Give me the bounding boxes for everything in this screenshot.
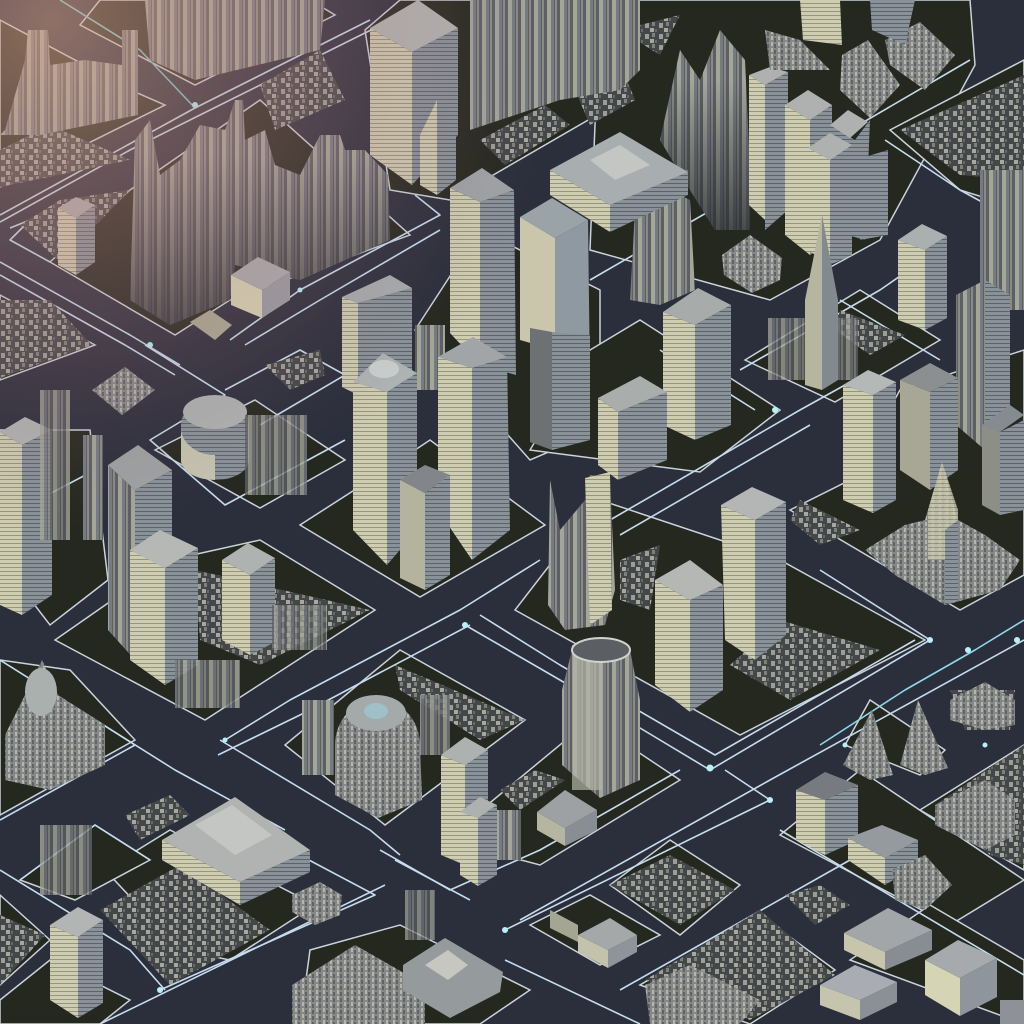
tower K (130, 530, 198, 685)
low ornate building, left (92, 367, 155, 415)
tall tower A (450, 168, 516, 375)
tower G (843, 370, 896, 513)
lower-left tower (50, 907, 103, 1018)
slim glass towers, centre (548, 472, 615, 630)
thin tower beside tower C (415, 325, 445, 390)
tower M (721, 487, 786, 660)
block of small buildings, right (935, 682, 1015, 850)
cylindrical tower with crown (562, 638, 640, 798)
tower far right edge (982, 405, 1024, 515)
tower J (108, 445, 172, 660)
tower N (655, 560, 723, 712)
needle spire tower (768, 215, 858, 390)
thin towers lower left (40, 825, 92, 895)
tower D (438, 337, 510, 560)
far-right towers and spires (956, 170, 1024, 450)
upper-right towers cluster (749, 0, 955, 265)
terraced wide building, top centre (550, 132, 688, 232)
large cube, lower right (925, 940, 997, 1016)
thin towers around dome (302, 695, 450, 775)
tower L (222, 543, 275, 655)
skyline: top-left hazy towers (0, 0, 325, 135)
gothic cathedral complex (865, 462, 1020, 605)
right tower pair (663, 288, 731, 440)
small twin low buildings (550, 910, 637, 968)
domed pavilion, upper right (722, 235, 782, 293)
bottom-edge grey clusters (645, 965, 1024, 1024)
short towers near tower K (175, 605, 327, 708)
tower with flat roof, upper centre (370, 0, 458, 185)
twin pagodas (843, 700, 948, 780)
tower far left (0, 417, 52, 615)
small cube building (231, 257, 290, 318)
low flat building, lower right (848, 825, 918, 885)
round drum building (181, 395, 249, 480)
cluster beside flat building (892, 855, 952, 910)
small spire (420, 100, 456, 195)
skyline: upper-left district towers (130, 100, 390, 325)
low tower F (400, 465, 450, 590)
tower P with annex (441, 737, 521, 886)
terraced building, lower left (162, 797, 310, 905)
round-top tower E (353, 353, 417, 565)
domed building, lower centre (335, 695, 422, 818)
temple with dome, lower left (5, 660, 105, 790)
hollow-top square building (796, 772, 858, 855)
dark tower in front of tower B (530, 328, 590, 450)
tall tower B (520, 198, 590, 380)
wide low block (844, 908, 932, 970)
bottom centre terraced complex (292, 890, 503, 1024)
low ornate pavilion (190, 310, 232, 340)
right mid towers (898, 224, 947, 330)
low block, bottom (820, 965, 897, 1020)
tower left, upper block (58, 197, 95, 275)
skyline: upper-centre towers (470, 0, 750, 305)
small block (292, 882, 342, 925)
small block beside cylinder (537, 790, 597, 846)
glowing circuit nodes (147, 102, 1020, 993)
thin towers left (40, 390, 103, 540)
tower H (900, 363, 958, 490)
thin towers beside drum (245, 415, 307, 495)
tower C (342, 275, 412, 395)
mid-rise double building (598, 376, 667, 480)
